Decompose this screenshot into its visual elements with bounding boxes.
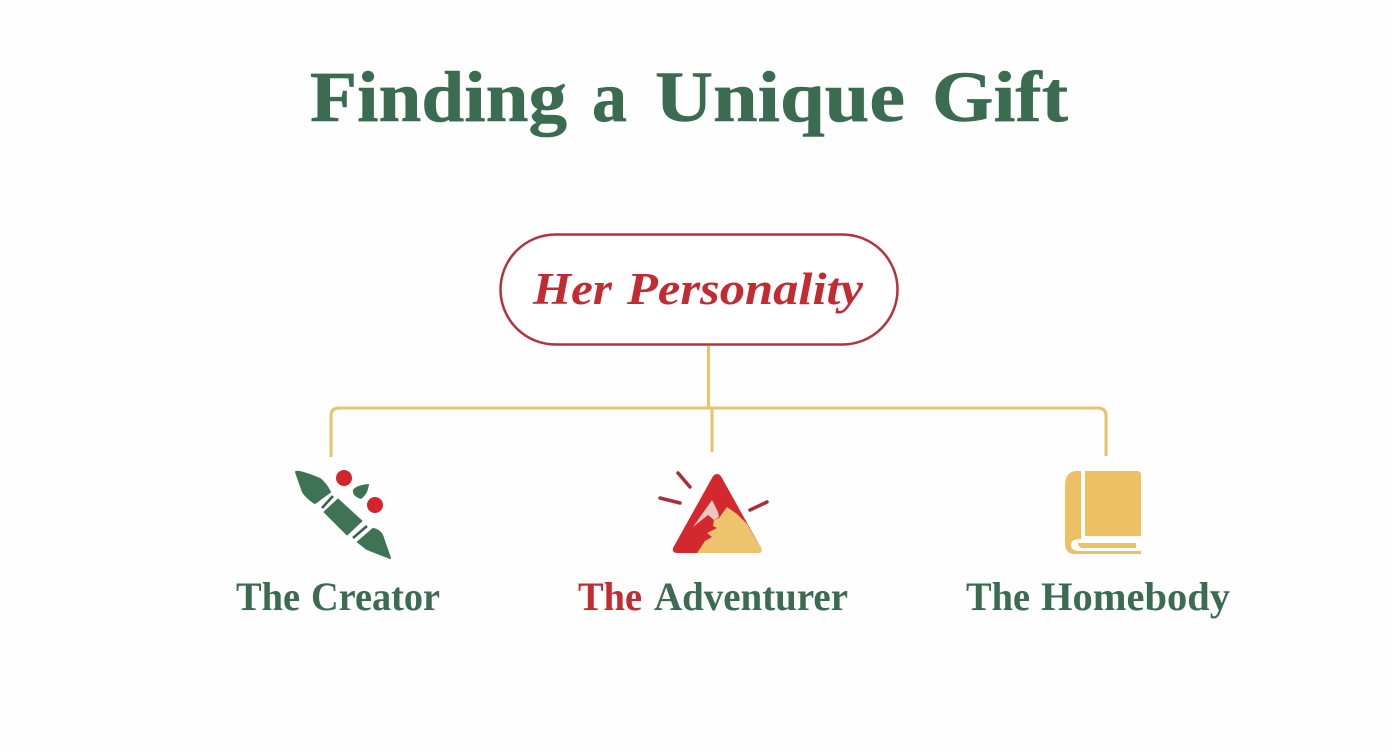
label: The Adventurer: Adventurer (654, 574, 848, 619)
central node: Her Personality (500, 234, 898, 344)
label: The Homebody: The (966, 574, 1030, 619)
icon: mountain with rays (660, 473, 767, 553)
title: Finding (310, 57, 567, 137)
icon: paintbrush and paint dots (296, 470, 390, 558)
title: Gift (932, 57, 1068, 137)
label: The Homebody: Homebody (1041, 574, 1230, 619)
label: The Creator: The (236, 574, 300, 619)
label: The Adventurer: The (578, 574, 642, 619)
title: Unique (655, 57, 905, 137)
central node: Her Personality: Her (532, 264, 613, 314)
icon: book (1065, 471, 1141, 554)
title: a (592, 57, 627, 137)
connector lines (331, 346, 1106, 457)
central node: Her Personality: Personality (626, 264, 864, 314)
label: The Creator: Creator (311, 574, 440, 619)
